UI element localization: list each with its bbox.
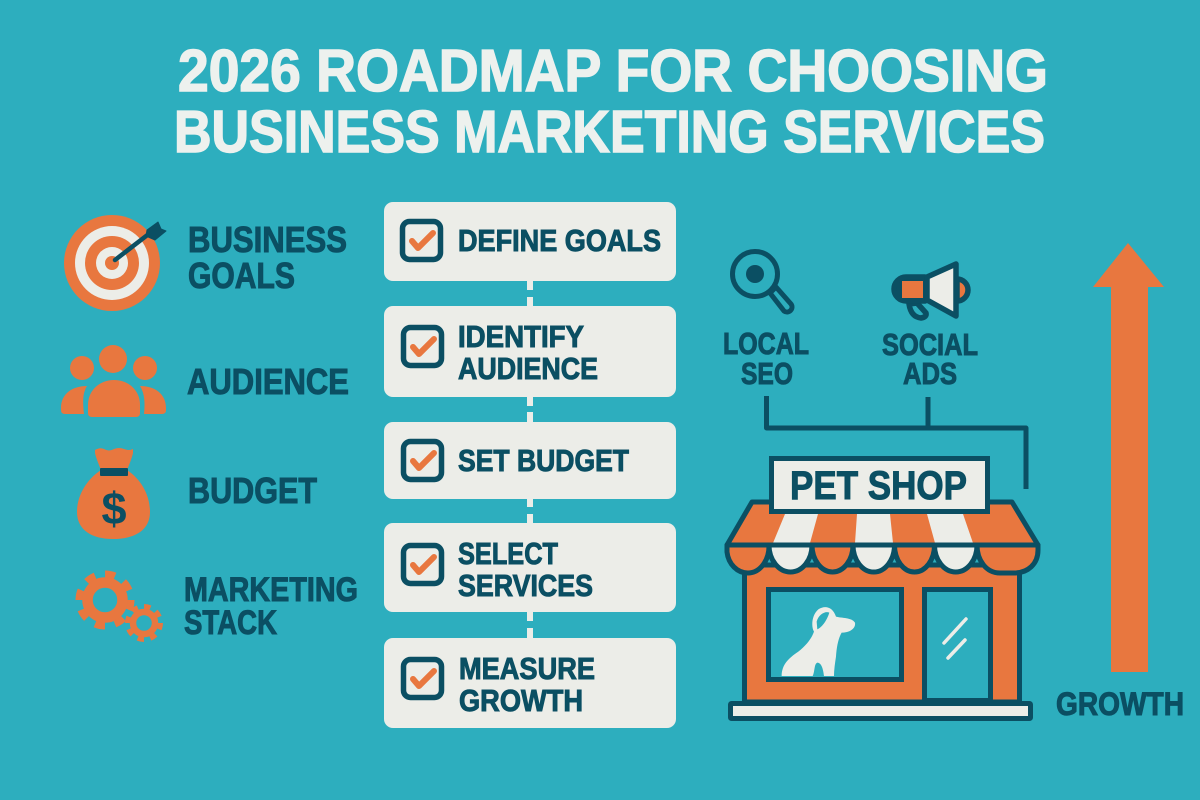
title: BUSINESS MARKETING SERVICES: [174, 99, 1045, 165]
arrow: growth: [1093, 243, 1164, 672]
shop window with dog: [768, 590, 902, 680]
label: local seo: SEO: [741, 356, 793, 391]
step: measure growth: GROWTH: [459, 683, 583, 718]
step: measure growth: [384, 638, 676, 728]
panel: left categories: [61, 215, 358, 642]
label: growth: GROWTH: [1056, 686, 1184, 722]
connector lines: [766, 396, 1026, 489]
label: social ads: [882, 327, 978, 391]
pet shop storefront: [727, 458, 1038, 718]
icon: target with dart: [64, 215, 166, 311]
step: identify audience: IDENTIFY: [458, 319, 584, 354]
step: select services: SERVICES: [458, 568, 593, 603]
label: social ads: SOCIAL: [882, 327, 978, 362]
step: identify audience: [384, 306, 676, 397]
title: 2026 ROADMAP FOR CHOOSING: [178, 38, 1048, 104]
step: set budget: SET BUDGET: [458, 443, 629, 478]
step: measure growth: MEASURE: [459, 651, 595, 686]
icon: magnifying glass: [732, 252, 792, 312]
step: select services: [384, 523, 676, 612]
label: business goals: GOALS: [188, 255, 295, 296]
base step: [730, 704, 1030, 718]
label: marketing stack: MARKETING: [184, 571, 358, 609]
step: set budget: [384, 422, 676, 499]
step: define goals: [384, 202, 676, 281]
shop sign: PET SHOP: [790, 464, 967, 508]
icon: audience people: [61, 345, 166, 417]
label: business goals: BUSINESS: [188, 219, 347, 260]
label: marketing stack: [184, 571, 358, 642]
icon: megaphone: [894, 264, 968, 318]
icon: money bag: $: [101, 483, 127, 534]
icon: money bag: [77, 448, 150, 539]
label: audience: AUDIENCE: [187, 361, 349, 402]
label: local seo: LOCAL: [723, 326, 809, 361]
panel: checklist steps: [384, 202, 676, 728]
step: select services: SELECT: [458, 536, 558, 571]
step: identify audience: AUDIENCE: [458, 351, 598, 386]
label: local seo: [723, 326, 809, 391]
door: [924, 590, 990, 700]
awning: [727, 502, 1038, 573]
label: social ads: ADS: [903, 356, 957, 391]
icon: gears: [79, 574, 160, 640]
label: marketing stack: STACK: [184, 604, 277, 642]
title: [174, 38, 1048, 165]
label: budget: BUDGET: [188, 470, 317, 511]
building wall: [744, 565, 1020, 702]
label: business goals: [188, 219, 347, 296]
step: define goals: DEFINE GOALS: [458, 223, 661, 258]
